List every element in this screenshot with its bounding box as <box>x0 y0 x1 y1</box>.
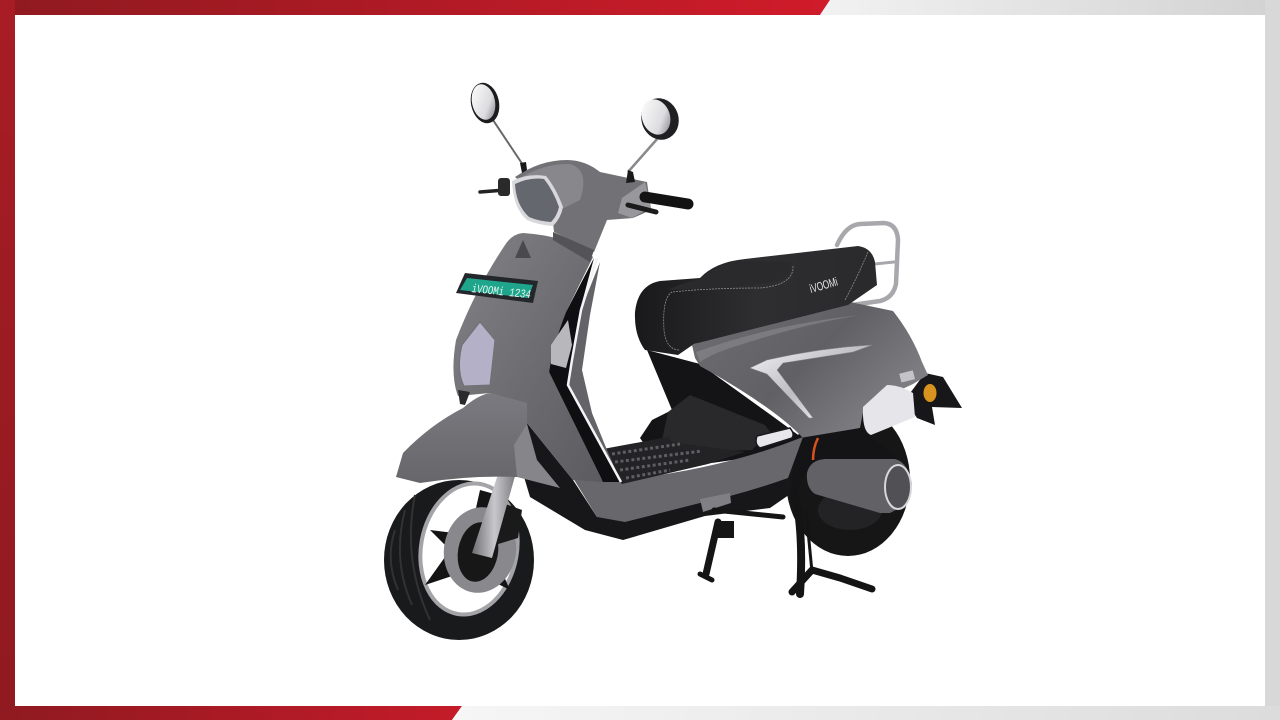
front number plate: iVOOMi 1234 <box>470 283 532 303</box>
left mirror <box>467 80 527 173</box>
right brake lever <box>628 205 656 212</box>
motor area <box>790 428 900 490</box>
floor step plate <box>700 493 731 512</box>
kick stand and footrest <box>700 510 783 580</box>
gap under shield <box>458 390 470 405</box>
handlebar switch housing <box>618 182 651 218</box>
chrome side trim <box>750 345 872 418</box>
front wheel <box>384 476 534 640</box>
brake caliper <box>495 503 522 545</box>
seat <box>635 246 877 355</box>
rear badge <box>899 370 915 383</box>
seat stitching <box>664 252 868 350</box>
front rim <box>410 476 528 622</box>
scooter illustration <box>384 80 962 640</box>
right mirror <box>626 93 684 183</box>
front indicator lamp <box>459 322 495 386</box>
front fender <box>396 393 530 483</box>
orange cable <box>813 438 818 460</box>
rear wheel <box>786 404 910 556</box>
front number plate <box>456 273 538 303</box>
centre stand <box>792 490 872 594</box>
fender side facet <box>514 424 560 488</box>
rear panel highlight <box>696 315 860 362</box>
rear number plate bracket <box>905 373 962 425</box>
white rear box <box>863 385 915 435</box>
chrome footboard reflector <box>756 428 793 448</box>
footwell mat <box>603 437 745 484</box>
white stripe <box>568 258 621 482</box>
rear leg shield grey <box>568 262 621 482</box>
front shield dark strip <box>549 258 620 482</box>
frame: top red bar <box>0 0 830 15</box>
frame: right grey bar <box>1265 0 1280 720</box>
right handlebar grip <box>645 197 688 204</box>
front spokes <box>425 490 510 590</box>
headlight <box>512 175 563 226</box>
neck <box>553 232 594 262</box>
seat upper pad <box>668 261 791 290</box>
frame: bottom grey bar <box>452 706 1280 720</box>
grab rail <box>837 223 898 305</box>
underside black <box>522 423 796 540</box>
frame: bottom red bar <box>0 706 462 720</box>
motor cover <box>807 459 912 513</box>
front fork <box>472 465 517 558</box>
headset <box>515 160 651 252</box>
frame: left red bar <box>0 0 15 720</box>
tunnel side panel <box>662 395 770 452</box>
left handlebar lever <box>480 178 510 196</box>
dark under-seat tunnel <box>640 350 805 470</box>
brake disc <box>437 501 523 599</box>
rear body panel <box>692 302 928 438</box>
front shield panel <box>453 233 603 482</box>
floorboard body band <box>573 437 803 522</box>
shield logo <box>515 240 531 258</box>
frame: top grey bar <box>820 0 1280 15</box>
seat brand text: iVOOMi <box>808 276 839 296</box>
headset light facet <box>520 164 583 210</box>
side indicator <box>551 320 572 368</box>
